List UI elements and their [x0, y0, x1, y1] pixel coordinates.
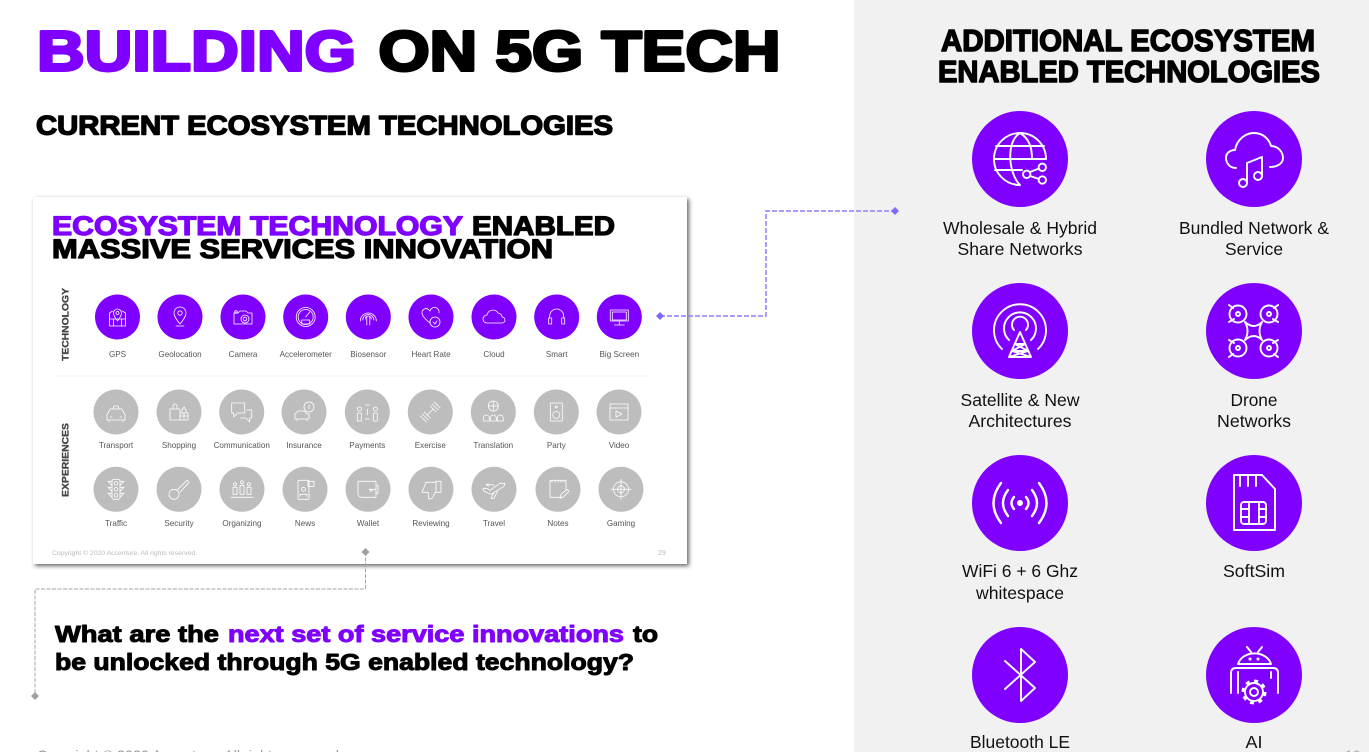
exp: Gaming — [598, 467, 644, 528]
exp: Party: Party — [547, 441, 567, 450]
exp: Notes — [536, 467, 580, 528]
slide title — [52, 211, 615, 264]
exp: Exercise: Exercise — [415, 441, 446, 450]
exp: Insurance: Insurance — [286, 441, 322, 450]
exp: Reviewing — [408, 467, 454, 528]
heading: additional ecosystem: ADDITIONAL ECOSYSTEM — [941, 24, 1315, 58]
item: Wholesale & Hybrid Share Networks — [943, 111, 1097, 259]
exp: Traffic: Traffic — [105, 519, 127, 528]
tech: Accelerometer: Accelerometer — [280, 350, 332, 359]
item: Satellite & New Architectures: Satellite & New — [960, 390, 1080, 410]
exp: Notes: Notes — [547, 519, 569, 528]
exp: Translation — [471, 390, 516, 450]
item: SoftSim: SoftSim — [1223, 561, 1285, 581]
tech: Camera: Camera — [229, 350, 258, 359]
tech: Biosensor — [346, 294, 391, 359]
slide title: MASSIVE SERVICES INNOVATION — [52, 234, 553, 264]
tech: Heart Rate — [408, 294, 454, 359]
row label: experiences: EXPERIENCES — [60, 422, 72, 497]
item: Bundled Network & Service — [1179, 111, 1329, 259]
icon: android gear — [1231, 647, 1278, 703]
question text: What are the — [55, 621, 219, 647]
question text: to — [633, 621, 658, 647]
tech: GPS: GPS — [109, 350, 127, 359]
exp: Gaming: Gaming — [607, 519, 635, 528]
item: Bluetooth LE — [970, 627, 1070, 752]
exp: Organizing — [220, 467, 264, 528]
item: Bundled Network & Service: Bundled Network & — [1179, 218, 1329, 238]
exp: News — [282, 467, 328, 528]
exp: News: News — [295, 519, 315, 528]
item: Satellite & New Architectures: Architectures — [968, 411, 1072, 431]
icon: tower — [994, 304, 1046, 357]
icon: globe share — [994, 133, 1046, 185]
exp: Security: Security — [164, 519, 195, 528]
arrow: purple connector — [656, 207, 899, 320]
exp: Communication: Communication — [214, 441, 270, 450]
icon: sim card — [1234, 475, 1275, 530]
tech: Smart — [534, 294, 579, 359]
tech: Geolocation — [158, 294, 202, 359]
heading: additional ecosystem — [938, 24, 1320, 89]
exp: Insurance — [282, 390, 326, 450]
exp: Payments — [345, 390, 390, 450]
item: Satellite & New Architectures — [960, 283, 1080, 431]
icon: cloud music — [1226, 133, 1283, 187]
item: WiFi 6 + 6 Ghz whitespace — [962, 455, 1078, 603]
tech: Big Screen — [597, 294, 642, 359]
panel: right background — [854, 0, 1369, 752]
exp: Travel — [472, 467, 516, 528]
exp: Traffic — [94, 467, 138, 528]
question text: be unlocked through 5G enabled technology? — [55, 649, 634, 675]
tech: Big Screen: Big Screen — [600, 350, 639, 359]
exp: Party — [534, 390, 579, 450]
title: BUILDING — [37, 20, 356, 84]
item: SoftSim — [1206, 455, 1302, 581]
item: Bluetooth LE: Bluetooth LE — [970, 732, 1070, 752]
tech: Accelerometer — [280, 294, 332, 359]
exp: Wallet — [346, 467, 390, 528]
icon: drone — [1229, 305, 1278, 357]
tech: Cloud — [472, 294, 516, 359]
exp: Transport: Transport — [99, 441, 134, 450]
exp: Security — [156, 467, 202, 528]
item: Drone Networks — [1206, 283, 1302, 431]
question text: next set of service innovations — [228, 621, 624, 647]
item: Wholesale & Hybrid Share Networks: Wholesale & Hybrid — [943, 218, 1097, 238]
question text — [55, 621, 658, 675]
slide copyright: Copyright © 2020 Accenture. All rights reserved. — [52, 549, 197, 557]
tech: Smart: Smart — [546, 350, 568, 359]
tech: Heart Rate: Heart Rate — [411, 350, 451, 359]
item: Bundled Network & Service: Service — [1225, 239, 1283, 259]
title — [37, 20, 780, 84]
exp: Wallet: Wallet — [357, 519, 380, 528]
tech: Camera — [220, 294, 266, 359]
slide title: ENABLED — [472, 211, 615, 241]
exp: Organizing: Organizing — [222, 519, 262, 528]
exp: Video — [596, 390, 642, 450]
exp: Transport — [94, 390, 138, 450]
item: Drone Networks: Networks — [1217, 411, 1291, 431]
exp: Communication — [214, 390, 270, 450]
item: WiFi 6 + 6 Ghz whitespace: WiFi 6 + 6 Ghz — [962, 561, 1078, 581]
exp: Travel: Travel — [483, 519, 505, 528]
heading: additional ecosystem: ENABLED TECHNOLOGIES — [938, 55, 1320, 89]
icon: wireless signal — [994, 483, 1046, 523]
tech: Geolocation: Geolocation — [158, 350, 202, 359]
panel: embedded slide — [33, 197, 687, 564]
row label: technology: TECHNOLOGY — [60, 287, 72, 361]
exp: Translation: Translation — [473, 441, 513, 450]
heading: current ecosystem technologies: CURRENT ECOSYSTEM TECHNOLOGIES — [36, 110, 613, 140]
tech: GPS — [95, 294, 140, 359]
exp: Payments: Payments — [349, 441, 385, 450]
exp: Shopping — [156, 390, 202, 450]
exp: Shopping: Shopping — [162, 441, 196, 450]
tech: Cloud: Cloud — [483, 350, 505, 359]
slide title: ECOSYSTEM TECHNOLOGY — [52, 211, 463, 241]
icon: bluetooth — [1005, 649, 1035, 701]
tech: Biosensor: Biosensor — [350, 350, 387, 359]
item: WiFi 6 + 6 Ghz whitespace: whitespace — [975, 583, 1064, 603]
exp: Video: Video — [609, 441, 630, 450]
arrow: grey connector — [31, 548, 370, 700]
item: Wholesale & Hybrid Share Networks: Share Networks — [958, 239, 1083, 259]
item: Drone Networks: Drone — [1230, 390, 1278, 410]
exp: Exercise — [408, 390, 453, 450]
item: AI — [1206, 627, 1302, 752]
item: AI: AI — [1246, 732, 1262, 752]
exp: Reviewing: Reviewing — [412, 519, 450, 528]
title: ON 5G TECH — [378, 20, 780, 84]
slide page number: 29 — [658, 550, 666, 557]
